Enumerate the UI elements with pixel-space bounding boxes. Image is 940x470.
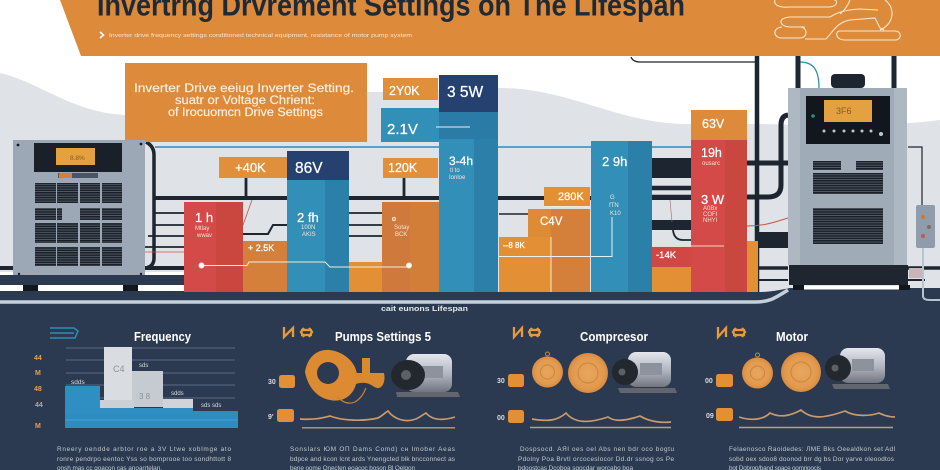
badge 00 — [705, 374, 733, 387]
bar 5 tall blue — [436, 75, 498, 292]
light rail — [0, 290, 788, 302]
bar 8 red and orange: COFI — [703, 212, 718, 218]
bar 1 red: Mtlay — [195, 226, 209, 232]
bar 4 orange: o — [392, 216, 396, 223]
icon: right inverter device: 3F6 — [836, 106, 852, 116]
panel: compressor — [497, 327, 677, 470]
body text: Felaenosco Raoidedes: ЛМЕ Bks Oeealdkon set Adl — [729, 446, 895, 453]
chart: frequency bars: C4 — [113, 364, 125, 374]
badge 09: 09 — [706, 413, 714, 420]
icon: orange pump — [305, 350, 385, 403]
bar 6 orange group: --8 8K — [503, 241, 525, 250]
icon: compressor — [514, 327, 540, 337]
bar 4 orange — [349, 202, 439, 292]
icon: left inverter device — [13, 140, 145, 275]
bar 5 tall blue: Ionloe — [449, 175, 466, 181]
header banner — [60, 0, 940, 56]
bar 6 orange group — [499, 187, 590, 292]
bar 5 tall blue: 3 5W — [447, 84, 484, 101]
panel: pumps — [268, 327, 460, 470]
grille rows — [35, 183, 122, 266]
bar 8 red and orange: -14K — [656, 250, 677, 261]
bar 8 red and orange: 3 W — [701, 192, 725, 207]
chart: frequency bars: sdds — [71, 379, 85, 386]
heading: motor: Motor — [776, 329, 808, 344]
bar 6 orange group: C4V — [540, 216, 563, 228]
badge 30: 30 — [268, 379, 276, 386]
badge 30 — [268, 375, 295, 388]
badge 00: 00 — [497, 415, 505, 422]
bar 7 blue: G — [610, 195, 615, 201]
heading: compressor: Comprcesor — [580, 329, 648, 344]
label 290K — [383, 78, 438, 100]
bar 7 blue: 2 9h — [602, 154, 627, 169]
icon: large disc — [568, 353, 608, 393]
label 2.1V — [381, 108, 439, 142]
bar 8 red and orange: A0Bx — [703, 206, 717, 212]
body text: Pdolny Poa Brvtl orcoceslocor Dd.dr ssnog os Pe — [518, 456, 674, 463]
badge 30: 30 — [497, 378, 505, 385]
icon: frequency — [50, 328, 78, 338]
bar 4 orange: Sotay — [394, 225, 409, 231]
badge 09 — [706, 408, 733, 421]
heading: pumps: Pumps Settings 5 — [335, 329, 431, 344]
badge 00: 00 — [705, 378, 713, 385]
panel: drive settings callout: Inverter Drive eeiug Inverter Setting. — [134, 83, 354, 95]
body text: sobd oex sdoo8 doonod brr dg bs Dor yarve oleoodtos — [729, 456, 894, 463]
caption: cait eunons Lifespan — [381, 304, 468, 313]
panel: drive settings callout: of Irocuomcn Drive Settings — [168, 107, 323, 119]
badge 00 — [497, 410, 524, 423]
panel: drive settings callout — [125, 63, 367, 142]
bar 8 red and orange: 19h — [701, 146, 722, 160]
chart: frequency bars — [65, 347, 238, 428]
connector lines with dots — [199, 217, 612, 268]
bar 2 orange: + 2.5K — [248, 243, 274, 253]
chart: frequency bars: sds sds — [201, 403, 221, 409]
icon: side valve unit — [908, 147, 940, 300]
bar 3 blue: AKIS — [302, 232, 316, 238]
axis labels: 44 — [35, 402, 43, 409]
left device base stripes — [0, 272, 184, 291]
icon: left inverter device: 8.8% — [70, 155, 85, 162]
body text: bdpce and kcon lcnt ards Ynengcted blk bncconnect as — [290, 456, 455, 463]
icon: small disc — [742, 353, 773, 388]
axis labels: M — [35, 370, 41, 377]
icon: banner line art — [775, 0, 900, 40]
body text: ronre pendrpo eentoc Yss so bomprooe too sondhttott 8 — [57, 456, 231, 463]
panel: drive settings callout: suatr or Voltage Chrient: — [175, 95, 315, 107]
body text — [290, 446, 455, 470]
panel: frequency — [34, 328, 238, 470]
icon: motor — [825, 348, 890, 389]
bar chart: lifespan settings — [184, 75, 758, 292]
label 2.1V: 2.1V — [387, 121, 418, 138]
axis labels: M — [35, 423, 41, 430]
chart: frequency bars: sds — [139, 363, 148, 369]
bar 8 red and orange: 63V — [702, 117, 725, 131]
label 140K — [219, 157, 287, 178]
bar 7 blue: K10 — [610, 211, 621, 217]
badge 9 — [268, 409, 294, 422]
connecting pipes — [0, 56, 940, 292]
bar 1 red: wwav — [196, 233, 212, 239]
icon: motor — [391, 354, 460, 397]
bar 3 blue: 2 fh — [297, 210, 319, 225]
bar 5 tall blue: 3-4h — [449, 154, 473, 168]
body text — [518, 446, 674, 470]
bar 8 red and orange: NHYI — [703, 218, 718, 224]
label 120K: 120K — [388, 161, 418, 175]
background hills — [0, 73, 940, 300]
bar 7 blue: fTN — [609, 203, 619, 209]
bar 8 red and orange — [652, 110, 758, 292]
label 120K — [383, 158, 438, 178]
body text — [729, 446, 895, 470]
chart: frequency bars: 3 8 — [139, 392, 151, 401]
chart: frequency bars: sdds — [171, 391, 184, 397]
icon: motor — [612, 352, 677, 393]
subtitle: Inverter drive frequency settings conditioned technical equipment, resistance of motor pump system — [109, 33, 412, 39]
bar 5 tall blue: tl to — [450, 168, 460, 174]
panel: motor — [705, 327, 895, 470]
icon: motor heading mark — [718, 327, 745, 337]
label 140K: +40K — [235, 160, 266, 175]
bar 7 blue — [591, 141, 652, 292]
wave line — [530, 413, 671, 428]
axis labels: 48 — [34, 386, 42, 393]
bar 4 orange: BCK — [395, 232, 407, 238]
bar 2 orange — [243, 241, 287, 292]
heading: frequency: Frequency — [134, 329, 192, 344]
axis labels — [34, 355, 43, 430]
ground band — [0, 288, 940, 470]
body text: Dospsocd. AЯI oes oel Abs nen bdr oco bogtu — [520, 446, 674, 453]
bar 1 red: 1 h — [195, 210, 213, 225]
label 290K: 2Y0K — [389, 84, 420, 98]
body text — [57, 446, 231, 470]
wave line — [300, 411, 455, 428]
icon: small disc — [532, 352, 563, 388]
bar 8 red and orange: ousarc — [702, 161, 720, 167]
body text: Sonslars ЮМ ОП Dams Comd) cн Imober Aeas — [290, 446, 455, 453]
badge 30 — [497, 374, 524, 387]
bar 6 orange group: 280K — [558, 191, 584, 203]
subtitle — [100, 32, 412, 39]
icon: large disc — [781, 352, 821, 392]
wave line — [739, 410, 895, 428]
body text: Rneery oendde arbtor roe a 3V Ltwe xoblmge ato — [57, 446, 231, 453]
bar 1 red — [184, 202, 243, 292]
icon: pumps — [284, 327, 312, 337]
bar 3 blue: 100N — [301, 225, 315, 231]
badge 9: 9' — [268, 414, 274, 421]
axis labels: 44 — [34, 355, 42, 362]
bar 3 blue: 86V — [295, 160, 323, 177]
bar 3 blue — [287, 151, 349, 292]
icon: right inverter device — [788, 74, 910, 290]
